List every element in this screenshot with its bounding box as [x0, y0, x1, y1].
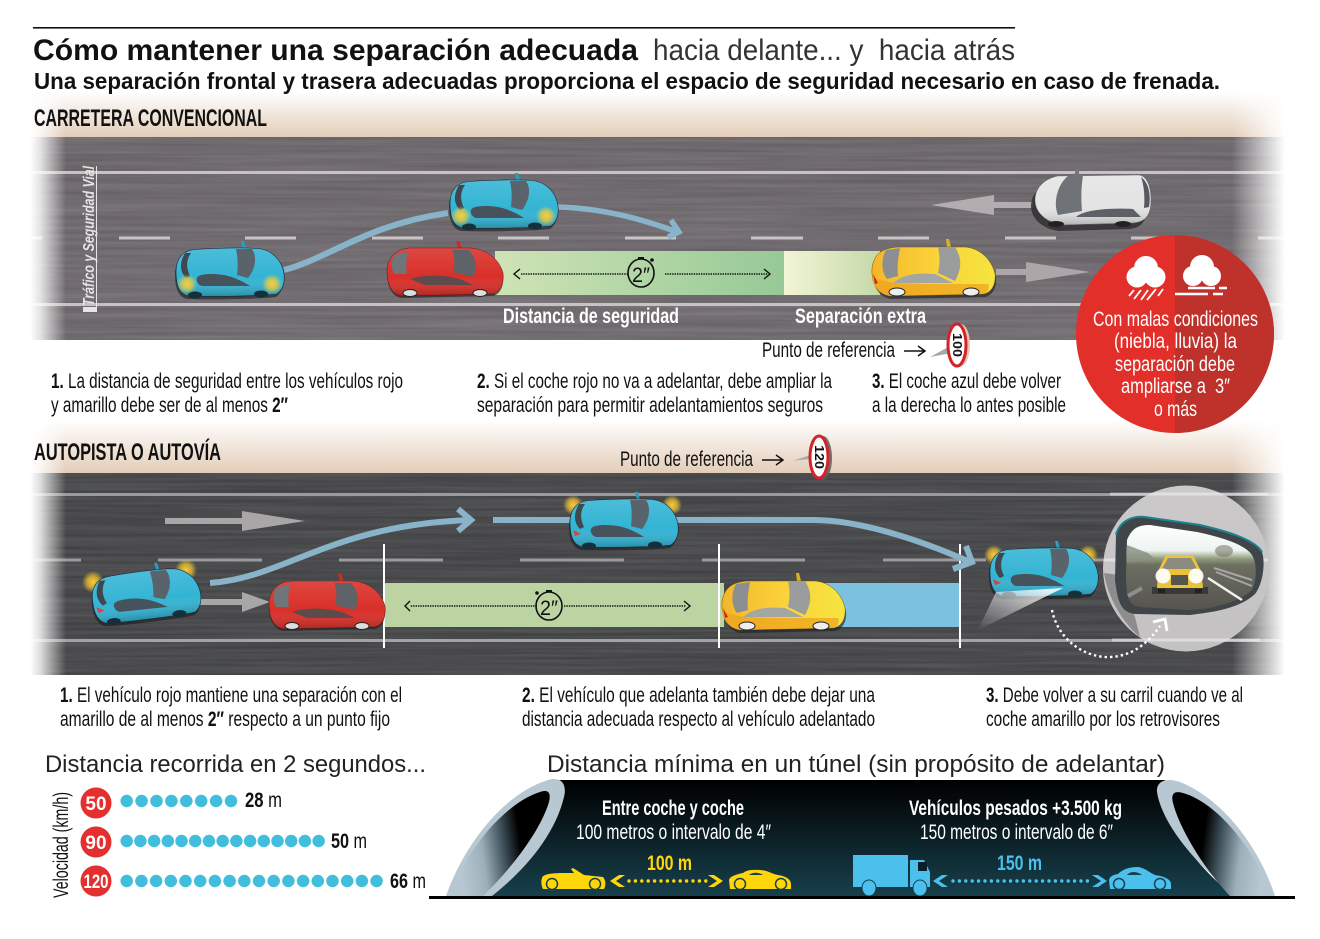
heading: motorway: AUTOPISTA O AUTOVÍA [34, 438, 221, 466]
row: 90 km/h: 50 m [331, 830, 367, 853]
arrow: travel direction [996, 262, 1090, 282]
icon: fog cloud [1175, 255, 1227, 294]
text block: motorway step 1: amarillo de al menos 2″ respecto a un punto fijo [60, 708, 390, 731]
icon: 100 speed sign: 100 [950, 333, 965, 357]
arrow: oncoming direction [931, 195, 1033, 215]
row: 50 km/h [80, 788, 282, 818]
text: cars [576, 797, 771, 875]
car: blue overtaking [449, 173, 558, 231]
stopwatch with dotted distance arrows [405, 590, 690, 620]
watermark credit: Tráfico y Seguridad Vial [81, 166, 98, 306]
title: Cómo mantener una separación adecuada [33, 34, 638, 67]
car: red [269, 574, 385, 631]
arrow: straight then return curve [493, 520, 972, 569]
stopwatch with dotted distance arrows: 2″ [540, 597, 559, 620]
icon: blue coupe [1109, 867, 1171, 890]
car: silver oncoming [1031, 169, 1151, 231]
reference point label motorway: Punto de referencia [620, 448, 753, 471]
reference vertical lines [384, 544, 960, 648]
view beam [978, 588, 1063, 630]
panel: tunnel [446, 779, 1275, 896]
text block: road step 1: y amarillo debe ser de al menos 2″ [51, 394, 288, 417]
path: overtaking curve [284, 213, 448, 270]
row: 50 km/h: 28 m [245, 789, 282, 812]
row: 120 km/h: 120 [84, 872, 108, 893]
row: 90 km/h: 90 [85, 833, 107, 854]
panel: beige band motorway [30, 420, 1285, 473]
text block: motorway step 3: coche amarillo por los retrovisores [986, 708, 1220, 731]
car: red [387, 241, 503, 298]
arrow: overtaking curve [210, 509, 471, 583]
car: yellow [722, 573, 846, 633]
text block: road step 1: 1. La distancia de seguridad entre los vehículos rojo [51, 370, 403, 393]
tunnel mouth right [1157, 780, 1275, 896]
callout text: Con malas condiciones [1093, 308, 1258, 331]
arrow: dotted glance to mirror [1052, 610, 1167, 657]
callout text: separación debe [1115, 353, 1235, 376]
row: 120 km/h: 66 m [390, 870, 426, 893]
row: 120 km/h [80, 866, 426, 896]
car: blue overtaking [563, 492, 682, 550]
icon: yellow coupe [729, 870, 791, 890]
stopwatch with dotted distance arrows [514, 257, 770, 287]
heading: conventional road: CARRETERA CONVENCIONAL [34, 105, 267, 132]
panel: beige band conventional road [30, 92, 1285, 137]
safety distance band [495, 251, 784, 295]
callout text [1093, 308, 1258, 421]
icon: rain cloud [1126, 256, 1166, 300]
text block: motorway step 3 [986, 684, 1243, 731]
text: cars: Entre coche y coche [602, 797, 744, 820]
text: cars: 100 m [647, 852, 692, 875]
icon: 120 speed sign [793, 436, 832, 480]
mirror frame [1115, 517, 1264, 615]
arrow: 100 m [610, 875, 723, 887]
callout: bad conditions [1076, 235, 1274, 433]
text block: road step 3: 3. El coche azul debe volver [872, 370, 1061, 393]
subtitle: Una separación frontal y trasera adecuadas proporciona el espacio de seguridad necesario en caso de frenada. [34, 68, 1220, 94]
callout text: ampliarse a 3″ [1121, 375, 1230, 398]
text block: road step 2 [477, 370, 832, 417]
reference point label: Punto de referencia [762, 339, 895, 362]
car: yellow [872, 239, 996, 299]
mirror glass [1126, 525, 1256, 610]
car in mirror [1152, 555, 1208, 594]
panel: conventional road scene [30, 92, 1320, 340]
text: heavy vehicles: 150 metros o intervalo de 6″ [920, 821, 1113, 844]
title: light part: hacia delante... y hacia atrás [653, 34, 1015, 67]
chart: distance dots [80, 788, 426, 896]
icon: 120 speed sign: 120 [812, 445, 827, 469]
extra gap band [820, 583, 960, 627]
text block: motorway step 1: 1. El vehículo rojo mantiene una separación con el [60, 684, 402, 707]
text block: road step 2: separación para permitir adelantamientos seguros [477, 394, 823, 417]
text block: motorway step 2: distancia adecuada respecto al vehículo adelantado [522, 708, 875, 731]
heading: distance travelled: Distancia recorrida en 2 segundos... [45, 751, 426, 778]
row: 50 km/h: 50 [85, 794, 107, 815]
text block: motorway step 2 [522, 684, 875, 731]
icon: yellow convertible [541, 868, 605, 890]
car: blue tilted start [82, 559, 203, 628]
text block: road step 3: a la derecha lo antes posible [872, 394, 1066, 417]
panel: mirror magnifier [1103, 486, 1269, 652]
text: cars: 100 metros o intervalo de 4″ [576, 821, 771, 844]
text: heavy vehicles: 150 m [997, 852, 1042, 875]
arrow: travel direction upper [165, 511, 305, 531]
text block: road step 2: 2. Si el coche rojo no va a adelantar, debe ampliar la [477, 370, 832, 393]
row: 90 km/h [80, 826, 367, 858]
icon: 100 speed sign [930, 324, 970, 366]
arrow: travel direction lower [198, 592, 270, 612]
ground line [429, 896, 1295, 899]
text: heavy vehicles [909, 797, 1122, 875]
car: blue start [175, 241, 284, 299]
icon: blue truck [853, 855, 930, 896]
arrow: return curve [557, 207, 679, 237]
callout text: (niebla, lluvia) la [1114, 330, 1237, 353]
panel: motorway scene [30, 420, 1320, 675]
text block: motorway step 2: 2. El vehículo que adelanta también debe dejar una [522, 684, 875, 707]
text block: motorway step 1 [60, 684, 402, 731]
text: heavy vehicles: Vehículos pesados +3.500 kg [909, 797, 1122, 820]
arrow: 150 m [933, 875, 1107, 887]
car: blue returning [984, 541, 1098, 599]
text block: road step 3 [872, 370, 1066, 417]
tunnel mouth left [446, 779, 565, 896]
label: safety distance: Distancia de seguridad [503, 305, 679, 328]
heading: tunnel: Distancia mínima en un túnel (sin propósito de adelantar) [547, 751, 1165, 778]
extra separation band [784, 251, 880, 295]
text block: road step 1 [51, 370, 403, 417]
stopwatch with dotted distance arrows: 2″ [632, 264, 651, 287]
top rule [33, 27, 1015, 29]
label: extra separation: Separación extra [795, 305, 926, 328]
axis label: speed: Velocidad (km/h) [50, 792, 73, 898]
callout text: o más [1154, 398, 1197, 421]
safety distance band [384, 583, 724, 627]
